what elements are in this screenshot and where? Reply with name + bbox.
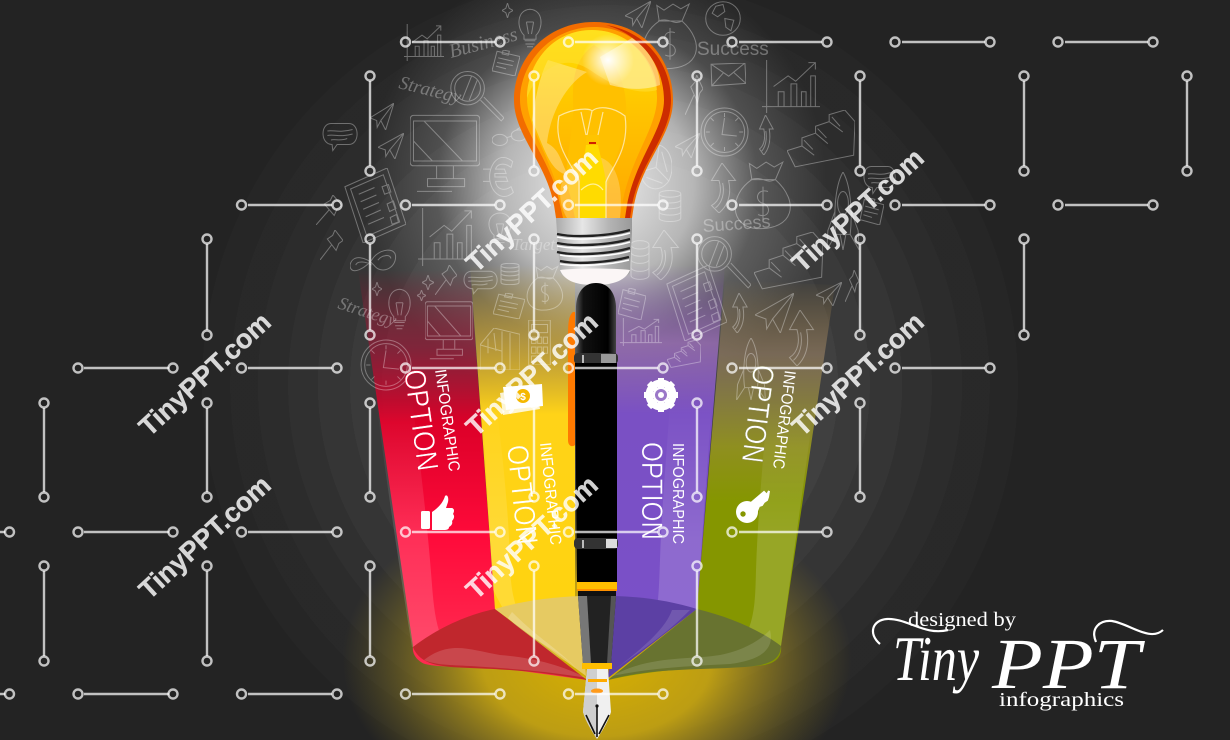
glow: light around bulb: [367, 0, 827, 415]
doodle icons: [316, 1, 895, 400]
doodle words: Success: [702, 211, 771, 236]
label: purple option: OPTION: [635, 442, 668, 540]
panel: red band: [358, 270, 587, 680]
label: olive option: INFOGRAPHIC: [769, 370, 798, 470]
panel: olive band: [608, 280, 835, 680]
icon: banknotes: $: [520, 392, 526, 403]
watermarks: TinyPPT.com: [786, 307, 930, 442]
icon: banknotes: [500, 384, 543, 415]
grip: [578, 596, 616, 664]
logo: designed by TinyPPT infographics: [873, 609, 1163, 711]
icon: key: [736, 491, 769, 523]
label: red option: INFOGRAPHIC: [431, 368, 462, 473]
logo: designed by TinyPPT infographics: designed by: [908, 609, 1016, 631]
watermarks: TinyPPT.com: [133, 307, 277, 442]
doodle words: [336, 23, 771, 330]
doodle words: Target: [512, 235, 556, 254]
nib: [583, 669, 611, 739]
glow: gold under book: [342, 490, 852, 740]
doodle words: Business: [447, 23, 520, 63]
pen clip: [568, 312, 575, 446]
doodle words: Success: [697, 39, 769, 60]
lower band: [574, 538, 618, 549]
bulb base: [556, 218, 632, 285]
panel: yellow band: [470, 265, 575, 668]
label: red option: OPTION: [397, 367, 444, 473]
doodle words: Strategy: [336, 293, 399, 330]
label: purple option: INFOGRAPHIC: [669, 443, 686, 544]
upper band: [574, 353, 618, 364]
label: yellow option: OPTION: [500, 443, 543, 546]
watermarks: TinyPPT.com: [460, 307, 604, 442]
watermarks: TinyPPT.com: [460, 470, 604, 605]
logo: designed by TinyPPT infographics: PPT: [991, 624, 1146, 704]
fountain pen: [568, 283, 618, 739]
logo: designed by TinyPPT infographics: Tiny: [893, 623, 979, 694]
icon: thumbs up: [421, 495, 454, 530]
gold band: [577, 582, 617, 591]
label: yellow option: [500, 442, 564, 546]
panel: purple band: [610, 265, 725, 668]
book fold: lower pages: [413, 596, 781, 680]
pen cap: [576, 283, 616, 358]
pen barrel: [575, 363, 617, 582]
label: yellow option: INFOGRAPHIC: [536, 442, 564, 546]
label: olive option: [735, 363, 798, 470]
light bulb: [514, 22, 673, 218]
logo: designed by TinyPPT infographics: infographics: [999, 689, 1124, 711]
doodle words: Strategy: [397, 72, 464, 108]
label: olive option: OPTION: [735, 363, 780, 464]
icon: gear: [644, 378, 678, 412]
watermarks: TinyPPT.com: [133, 470, 277, 605]
watermarks: TinyPPT.com: [786, 143, 930, 278]
label: purple option: [635, 442, 686, 544]
watermarks: TinyPPT.com: [460, 143, 604, 278]
label: red option: [397, 367, 462, 473]
watermarks: [133, 143, 930, 605]
